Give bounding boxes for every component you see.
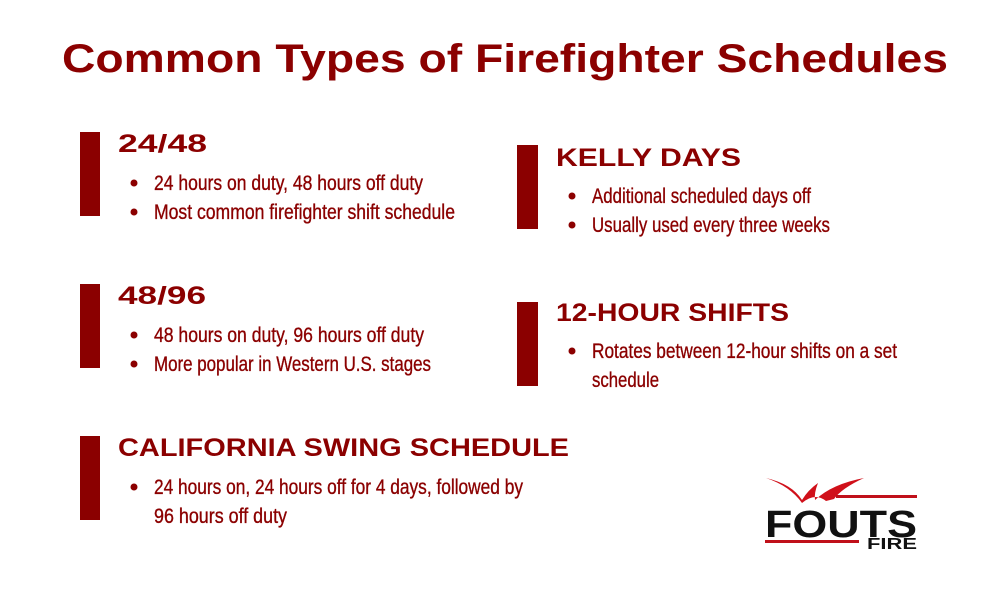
panel: Kelly days: KELLY DAYS	[556, 144, 741, 172]
panel: 24/48: Most common firefighter shift schedule	[154, 201, 455, 224]
panel: 24/48: 24/48	[118, 130, 207, 158]
panel: 12-hour shifts: 12-HOUR SHIFTS	[556, 299, 789, 327]
panel: 48/96: More popular in Western U.S. stages	[154, 353, 431, 376]
panel: 12-hour shifts: Rotates between 12-hour shifts on a set	[592, 340, 897, 363]
panel: 48/96: 48/96	[118, 282, 206, 310]
logo: Fouts Fire: FIRE	[867, 536, 917, 553]
title: Common Types of Firefighter Schedules	[62, 37, 948, 81]
panel: 24/48: 24 hours on duty, 48 hours off duty	[154, 172, 423, 195]
panel: 12-hour shifts	[517, 299, 897, 392]
panel: California swing	[80, 434, 569, 528]
panel: California swing: 96 hours off duty	[154, 505, 287, 528]
logo: Fouts Fire: FOUTS	[765, 504, 917, 546]
logo: Fouts Fire	[765, 478, 917, 553]
panel: 12-hour shifts: schedule	[592, 369, 659, 392]
panel: Kelly days	[517, 144, 830, 237]
panel: 24/48	[80, 130, 455, 224]
panel: 48/96: 48 hours on duty, 96 hours off duty	[154, 324, 424, 347]
panel: California swing: CALIFORNIA SWING SCHEDULE	[118, 434, 569, 462]
panel: California swing: 24 hours on, 24 hours off for 4 days, followed by	[154, 476, 523, 499]
panel: Kelly days: Additional scheduled days off	[592, 185, 811, 208]
panel: Kelly days: Usually used every three weeks	[592, 214, 830, 237]
panel: 48/96	[80, 282, 431, 376]
